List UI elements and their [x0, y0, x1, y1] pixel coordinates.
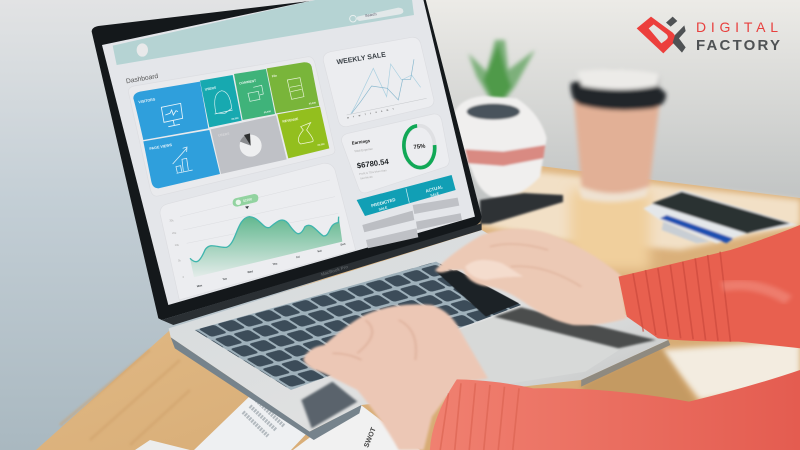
tile: visitors [133, 82, 208, 140]
area series [190, 217, 342, 277]
hands and sleeves [303, 225, 800, 450]
panel: weekly sale chart: MTWTFSSMT [347, 108, 398, 120]
panel: earnings: Earnings [351, 138, 371, 146]
axis labels: Mon [196, 283, 203, 288]
panel: earnings: $6780.54 [356, 157, 390, 170]
axis labels: Sun [340, 242, 346, 247]
papers on table [135, 392, 420, 450]
panel: area chart [160, 163, 356, 300]
laptop lid bezel [92, 0, 482, 325]
tile: users: 00,000 [231, 118, 240, 121]
tile: users pie: USERS [218, 132, 231, 138]
paper text: SWOT [363, 426, 378, 449]
dark tray under pot [480, 193, 563, 224]
panel: weekly sale chart: WEEKLY SALE [336, 52, 387, 66]
tile: users: USERS [204, 86, 217, 92]
tile: file: 00,000 [309, 102, 317, 106]
tile: page views [143, 130, 220, 188]
hinge label: MacBook Pro [320, 264, 349, 277]
wooden table [36, 166, 800, 450]
panel: area chart: 0 [183, 275, 185, 279]
logo: Digital Factory [637, 17, 780, 54]
sales table: ACTUAL [425, 184, 444, 194]
keyboard [195, 262, 521, 390]
top bar [113, 0, 414, 65]
panel: earnings: Total Expense [354, 147, 373, 153]
smartphone and pen [643, 190, 798, 243]
dashboard heading: Dashboard [126, 73, 159, 85]
cup body [574, 102, 659, 193]
sales table: SALE [430, 191, 440, 198]
donut gauge: 75% [413, 144, 426, 151]
tile: comment: COMMENT [239, 79, 256, 86]
sales table: SALE [378, 205, 389, 212]
tile: users [200, 75, 242, 127]
trackpad [459, 307, 627, 387]
screen [102, 0, 475, 305]
sales table [357, 175, 462, 248]
axis labels: Wed [247, 269, 254, 274]
panel: area chart: 30k [169, 218, 174, 222]
axis labels: Fri [296, 255, 300, 259]
panel: tile board [128, 57, 335, 196]
axis labels: Sat [317, 248, 322, 253]
panel: area chart: 5k [178, 258, 181, 262]
axis labels: Tue [222, 276, 228, 281]
pot [454, 96, 547, 198]
tile: revenue: REVENUE [282, 117, 299, 124]
right sleeve [618, 225, 800, 348]
value pill [233, 194, 258, 209]
axis labels [196, 242, 346, 288]
panel: earnings [342, 114, 449, 193]
panel: earnings: Profit is 75% More than [359, 168, 387, 176]
logo text: factory: FACTORY [696, 37, 780, 54]
coffee cup [571, 69, 666, 202]
tile: file [267, 62, 319, 113]
plant leaves [468, 40, 535, 110]
tile: revenue [277, 107, 329, 158]
tile: comment [234, 69, 275, 120]
panel: earnings: last Month [360, 175, 373, 180]
panel: weekly sale chart [323, 37, 434, 127]
tile: revenue: 00,000 [317, 144, 326, 147]
laptop base [169, 230, 670, 440]
right hand [435, 229, 627, 325]
tile: comment: 00,000 [264, 111, 272, 114]
axis labels: Thu [272, 261, 278, 266]
left hand [303, 304, 488, 450]
top bar: Search [365, 12, 377, 18]
tile: visitors: VISITORS [138, 97, 156, 104]
tile: page views: PAGE VIEWS [149, 143, 173, 151]
left sleeve [430, 370, 800, 450]
potted plant [454, 40, 547, 198]
logo mark [637, 17, 686, 53]
tile: users pie [211, 115, 287, 174]
tile: file: File [271, 73, 278, 78]
cup lid [571, 69, 666, 110]
panel: area chart: 10k [175, 243, 180, 247]
value pill: $2250 [243, 197, 253, 203]
sales table: PREDICTED [371, 197, 396, 208]
panel: area chart: 20k [172, 231, 177, 235]
logo text: digital: DIGITAL [696, 19, 778, 35]
